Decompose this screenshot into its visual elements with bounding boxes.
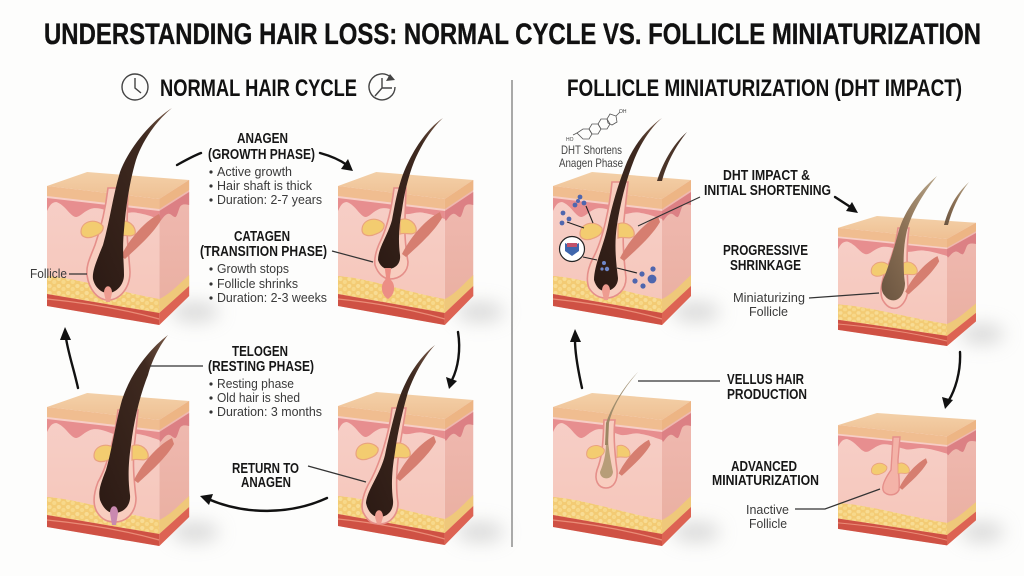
block shadows (171, 302, 1004, 542)
label: inactive follicle (746, 502, 789, 531)
icon: clock (122, 74, 148, 100)
receptor badge (560, 236, 584, 262)
skin layers (47, 393, 189, 546)
label: miniaturizing follicle (733, 290, 805, 319)
papilla (104, 286, 112, 302)
hair shaft (93, 108, 172, 293)
skin layers (47, 172, 189, 325)
label: telogen: Old hair is shed (217, 390, 300, 405)
second hair (944, 182, 969, 225)
hair shaft (99, 335, 168, 513)
label: telogen (208, 344, 322, 419)
papilla (110, 506, 118, 525)
follicle sheath (596, 420, 617, 488)
glands and muscle (587, 440, 651, 476)
DHT molecule cluster 1 (573, 195, 586, 207)
follicle sheath (94, 410, 138, 522)
arrow: DHT impact to shrinkage (835, 197, 858, 213)
label: DHT impact and initial shortening (704, 168, 831, 199)
arrow: catagen to return (446, 332, 459, 389)
skin block 6: progressive shrinkage (838, 176, 976, 346)
skin block 1: anagen (47, 108, 189, 325)
label: catagen: Growth stops (217, 261, 289, 276)
molecule diagram (573, 112, 620, 139)
papilla (602, 284, 610, 300)
DHT molecule cluster 2 (560, 211, 571, 225)
glands and muscle (94, 438, 174, 483)
label: advanced miniaturization (712, 459, 819, 489)
skin layers (553, 172, 691, 325)
label: anagen (208, 131, 322, 207)
label: follicle: Follicle (30, 266, 67, 281)
skin layers (338, 392, 473, 545)
label: telogen: (RESTING PHASE) (208, 359, 314, 375)
label: advanced miniaturization: MINIATURIZATION (712, 473, 819, 489)
label: progressive shrinkage: PROGRESSIVE (723, 243, 808, 259)
label: return to anagen: ANAGEN (241, 475, 291, 491)
hair shaft (594, 118, 662, 291)
follicle sheath (87, 188, 130, 300)
follicle sheath (881, 228, 909, 308)
skin block 7: advanced miniaturization (838, 413, 976, 545)
label: catagen: (TRANSITION PHASE) (200, 244, 327, 260)
inactive follicle (883, 437, 900, 495)
skin block 4: telogen (47, 335, 189, 546)
label: anagen: Hair shaft is thick (217, 178, 312, 193)
follicle sheath (362, 408, 406, 524)
glands and muscle (871, 458, 927, 490)
arrow: shrinkage to advanced (942, 352, 960, 409)
label: inactive follicle: Inactive (746, 502, 789, 517)
centre divider (511, 80, 513, 547)
hair shaft (366, 345, 435, 517)
label: catagen: Follicle shrinks (217, 276, 298, 291)
caption: DHT shortens anagen phase: Anagen Phase (559, 156, 623, 170)
label: inactive follicle: Follicle (749, 516, 787, 531)
label: catagen: CATAGEN (234, 229, 290, 245)
hair shaft (882, 176, 937, 300)
hair shaft (378, 118, 443, 269)
label: DHT impact and initial shortening: INITIAL SHORTENING (704, 183, 831, 199)
arrow: cycle to anagen tail (177, 153, 201, 165)
glands and muscle (362, 212, 442, 257)
label: telogen: TELOGEN (232, 344, 288, 360)
label: miniaturizing follicle: Follicle (749, 304, 788, 319)
heading: normal hair cycle: NORMAL HAIR CYCLE (160, 75, 357, 102)
skin block 2: catagen (338, 118, 473, 325)
label: vellus hair production (727, 372, 807, 403)
DHT molecule cluster 3 (632, 266, 656, 289)
follicle sheath (587, 182, 628, 298)
label: advanced miniaturization: ADVANCED (731, 459, 797, 475)
papilla (382, 268, 394, 299)
label: DHT impact and initial shortening: DHT IMPACT & (723, 168, 810, 184)
vellus bulb (600, 440, 613, 478)
caption: DHT shortens anagen phase: DHT Shortens (561, 143, 622, 157)
glands and muscle (81, 214, 161, 259)
label: return to anagen (232, 461, 299, 491)
molecule label HO: HO (566, 137, 574, 143)
DHT pointer lines (567, 206, 637, 273)
glands and muscle (871, 256, 939, 294)
label: catagen: Duration: 2-3 weeks (217, 290, 327, 305)
skin layers (553, 393, 691, 546)
label: anagen: Duration: 2-7 years (217, 192, 322, 207)
label: return to anagen: RETURN TO (232, 461, 299, 477)
blue dots in hair (600, 261, 609, 271)
papilla (375, 510, 383, 524)
arrow: telogen to anagen (60, 327, 78, 388)
skin layers (338, 172, 473, 325)
label: anagen: (GROWTH PHASE) (208, 147, 315, 163)
label: progressive shrinkage: SHRINKAGE (730, 258, 801, 274)
label: miniaturizing follicle: Miniaturizing (733, 290, 805, 305)
label: anagen: ANAGEN (237, 131, 288, 147)
arrow: return to telogen (200, 494, 327, 511)
glands and muscle (580, 216, 660, 261)
molecule label OH: OH (619, 109, 627, 115)
glands and muscle (356, 436, 436, 481)
arrow: anagen to catagen (320, 153, 353, 171)
label: anagen: Active growth (217, 164, 292, 179)
skin layers (838, 413, 976, 545)
leader lines (69, 197, 880, 509)
label: vellus hair production: PRODUCTION (727, 387, 807, 403)
arrow: vellus to DHT impact (570, 329, 582, 388)
label: catagen (200, 229, 327, 305)
label: vellus hair production: VELLUS HAIR (727, 372, 804, 388)
label: telogen: Resting phase (217, 376, 294, 391)
label: progressive shrinkage (723, 243, 808, 274)
second hair (657, 132, 687, 181)
icon: clock with arrow (369, 74, 395, 100)
skin block 5: DHT impact (553, 118, 691, 325)
follicle sheath (375, 188, 408, 279)
label: telogen: Duration: 3 months (217, 404, 322, 419)
vellus hair (605, 372, 638, 445)
skin layers (838, 216, 976, 346)
skin block 8: vellus hair (553, 372, 691, 546)
skin block 3: return to anagen (338, 345, 473, 545)
